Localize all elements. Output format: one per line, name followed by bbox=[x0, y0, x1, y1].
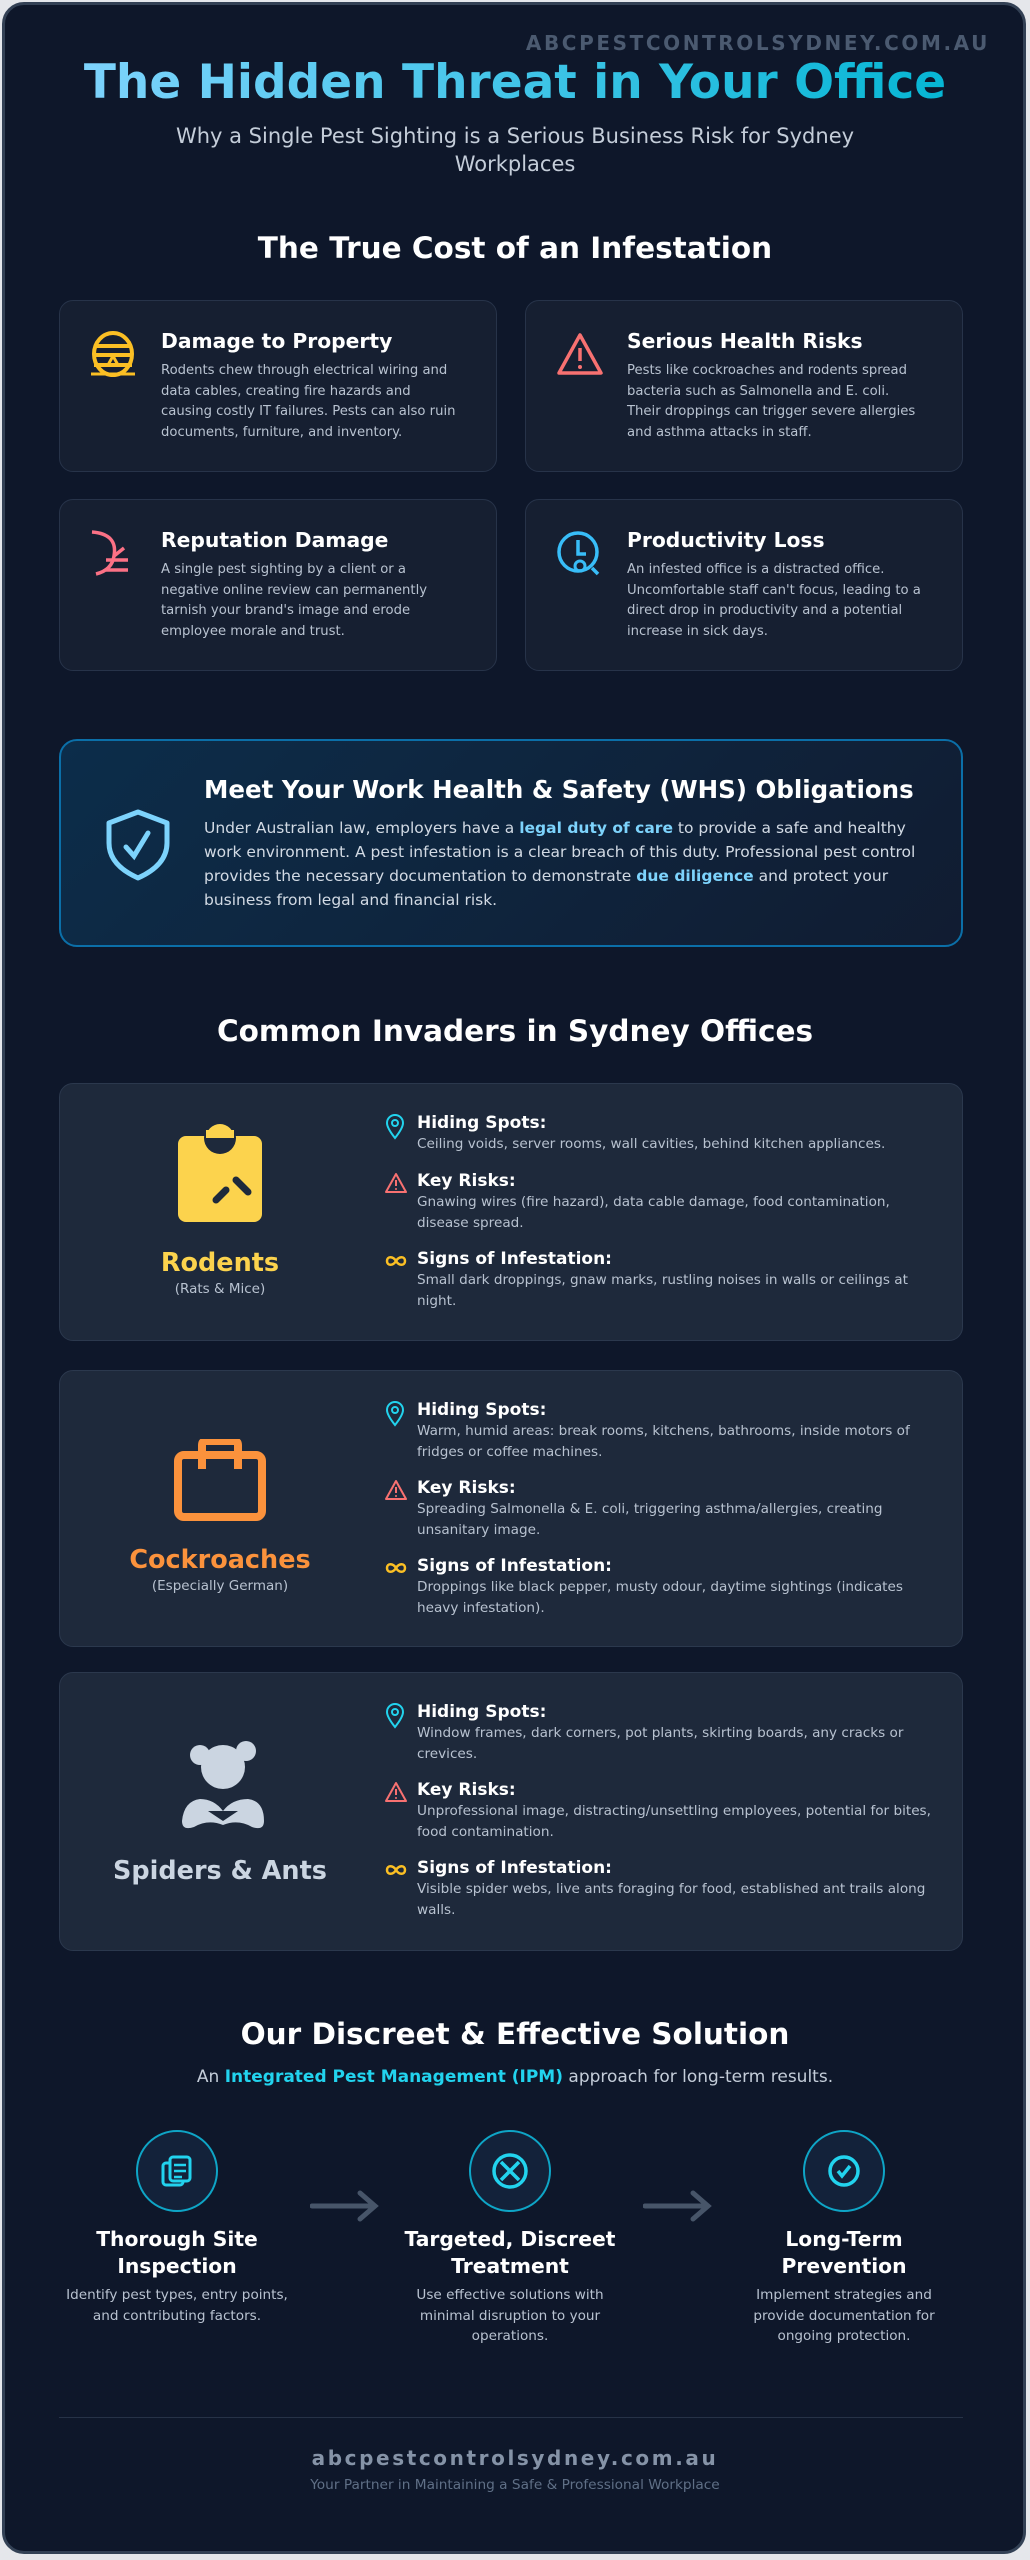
panel: damage to property bbox=[59, 300, 497, 472]
item: signs: Signs of Infestation: bbox=[417, 1249, 612, 1269]
panel: WHS obligations bbox=[59, 739, 963, 947]
item: signs bbox=[386, 1858, 925, 1918]
title: The Hidden Threat in Your Office bbox=[84, 55, 946, 110]
WHS body: Under Australian law, employers have a legal duty of care to provide a safe and healthy bbox=[204, 819, 906, 837]
step 2 text bbox=[404, 2227, 616, 2344]
item: key risks: disease spread. bbox=[417, 1214, 524, 1230]
WHS body bbox=[204, 819, 915, 909]
WHS title: Meet Your Work Health & Safety (WHS) Obligations bbox=[204, 775, 914, 804]
item: key risks: unsanitary image. bbox=[417, 1522, 540, 1538]
icon: warning bbox=[557, 333, 603, 375]
panel: health risks: Serious Health Risks bbox=[627, 329, 863, 353]
item: signs: walls. bbox=[417, 1902, 455, 1918]
step 2 text: minimal disruption to your bbox=[420, 2308, 600, 2324]
panel: reputation: Reputation Damage bbox=[161, 528, 388, 552]
panel: health risks bbox=[525, 300, 963, 472]
panel: damage to property: Rodents chew through electrical wiring and bbox=[161, 363, 447, 378]
step 1 text: Identify pest types, entry points, bbox=[66, 2287, 288, 2303]
item: hiding spots: Window frames, dark corners, pot plants, skirting boards, any cracks or bbox=[417, 1725, 903, 1741]
item: hiding spots: Ceiling voids, server rooms, wall cavities, behind kitchen appliances. bbox=[417, 1136, 885, 1152]
item: hiding spots: Hiding Spots: bbox=[417, 1702, 546, 1722]
subtitle bbox=[176, 124, 854, 176]
item: key risks: Key Risks: bbox=[417, 1478, 516, 1498]
solution subtitle: An Integrated Pest Management (IPM) approach for long-term results. bbox=[197, 2067, 833, 2087]
item: hiding spots: Hiding Spots: bbox=[417, 1113, 546, 1133]
item: signs: night. bbox=[417, 1292, 456, 1308]
panel: productivity: Uncomfortable staff can't focus, leading to a bbox=[627, 582, 921, 598]
item: signs: Small dark droppings, gnaw marks, rustling noises in walls or ceilings at bbox=[417, 1272, 908, 1288]
item: signs bbox=[386, 1556, 903, 1616]
subtitle: Why a Single Pest Sighting is a Serious Business Risk for Sydney bbox=[176, 124, 854, 148]
item: key risks: food contamination. bbox=[417, 1824, 554, 1840]
step 2 text: Targeted, Discreet bbox=[404, 2227, 616, 2251]
panel: reputation: employee morale and trust. bbox=[161, 624, 345, 638]
icon: damaged bbox=[91, 331, 135, 377]
item: signs: heavy infestation). bbox=[417, 1600, 545, 1616]
panel: rodents bbox=[59, 1083, 963, 1341]
item: key risks: Unprofessional image, distracting/unsettling employees, potential for bites, bbox=[417, 1803, 931, 1819]
panel: reputation: A single pest sighting by a client or a bbox=[161, 562, 406, 577]
panel: spiders & ants bbox=[59, 1672, 963, 1951]
step 3 text: Long-Term bbox=[785, 2227, 903, 2251]
item: key risks: Key Risks: bbox=[417, 1171, 516, 1191]
panel: health risks: Their droppings can trigger severe allergies bbox=[627, 404, 915, 419]
heading: solution: Our Discreet & Effective Solution bbox=[241, 2017, 789, 2051]
step 1 text: and contributing factors. bbox=[93, 2308, 261, 2324]
arrow 1 bbox=[310, 2190, 379, 2222]
panel: productivity: increase in sick days. bbox=[627, 624, 768, 638]
item: hiding spots: fridges or coffee machines. bbox=[417, 1444, 602, 1460]
panel: productivity: direct drop in productivity and a potential bbox=[627, 603, 902, 618]
panel: damage to property: Damage to Property bbox=[161, 329, 392, 353]
item: signs: Visible spider webs, live ants foraging for food, established ant trails along bbox=[417, 1881, 925, 1897]
panel: damage to property: data cables, creating fire hazards and bbox=[161, 384, 411, 398]
item: signs: Signs of Infestation: bbox=[417, 1556, 612, 1576]
step 2 icon bbox=[469, 2130, 551, 2212]
step 3 text bbox=[753, 2227, 935, 2344]
item: key risks bbox=[385, 1478, 882, 1538]
icon: cockroach bag bbox=[174, 1439, 266, 1521]
item: key risks: Key Risks: bbox=[417, 1780, 516, 1800]
step 1 text: Thorough Site bbox=[96, 2227, 258, 2251]
footer tagline: Your Partner in Maintaining a Safe & Professional Workplace bbox=[310, 2477, 720, 2493]
step 2 text: operations. bbox=[472, 2328, 548, 2344]
icon: rodent bbox=[178, 1124, 262, 1222]
step 3 icon bbox=[803, 2130, 885, 2212]
step 3 text: provide documentation for bbox=[753, 2308, 935, 2324]
icon: reputation bbox=[92, 530, 128, 576]
panel: productivity: Productivity Loss bbox=[627, 528, 825, 552]
panel: reputation: negative online review can permanently bbox=[161, 582, 427, 598]
item: signs: Signs of Infestation: bbox=[417, 1858, 612, 1878]
item: key risks bbox=[385, 1171, 890, 1230]
step 1 text: Inspection bbox=[117, 2254, 237, 2278]
icon: clock bbox=[557, 531, 600, 576]
panel: cockroaches: (Especially German) bbox=[152, 1578, 288, 1594]
step 1 text bbox=[66, 2227, 288, 2324]
icon: shield bbox=[106, 810, 170, 880]
panel: productivity: An infested office is a distracted office. bbox=[627, 562, 884, 577]
arrow 2 bbox=[643, 2190, 712, 2222]
panel: health risks: bacteria such as Salmonella and E. coli. bbox=[627, 384, 889, 398]
WHS body: provides the necessary documentation to demonstrate due diligence and protect your bbox=[204, 867, 888, 885]
step 2 text: Treatment bbox=[451, 2254, 569, 2278]
footer domain: abcpestcontrolsydney.com.au bbox=[312, 2446, 718, 2470]
item: hiding spots: Hiding Spots: bbox=[417, 1400, 546, 1420]
heading: common invaders: Common Invaders in Sydney Offices bbox=[217, 1014, 813, 1048]
item: hiding spots: crevices. bbox=[417, 1746, 477, 1762]
panel: reputation: tarnish your brand's image and erode bbox=[161, 603, 410, 618]
WHS body: work environment. A pest infestation is a clear breach of this duty. Professional pest control bbox=[204, 843, 915, 861]
panel: health risks: and asthma attacks in staff. bbox=[627, 424, 812, 440]
panel: damage to property: causing costly IT failures. Pests can also ruin bbox=[161, 404, 455, 419]
item: key risks: Spreading Salmonella & E. coli, triggering asthma/allergies, creating bbox=[417, 1501, 882, 1517]
item: signs: Droppings like black pepper, musty odour, daytime sightings (indicates bbox=[417, 1579, 903, 1595]
WHS body: business from legal and financial risk. bbox=[204, 891, 497, 909]
panel: productivity bbox=[525, 499, 963, 671]
icon: spider/ant bbox=[182, 1741, 264, 1828]
item: hiding spots bbox=[386, 1400, 910, 1460]
watermark: ABCPESTCONTROLSYDNEY.COM.AU bbox=[526, 31, 990, 55]
step 3 text: ongoing protection. bbox=[778, 2328, 910, 2344]
item: key risks: Gnawing wires (fire hazard), data cable damage, food contamination, bbox=[417, 1194, 890, 1210]
panel: cockroaches bbox=[59, 1370, 963, 1647]
step 1 icon bbox=[136, 2130, 218, 2212]
panel: rodents: (Rats & Mice) bbox=[175, 1281, 265, 1297]
label: cockroaches: Cockroaches bbox=[129, 1545, 311, 1575]
step 3 text: Implement strategies and bbox=[756, 2287, 932, 2303]
item: hiding spots: Warm, humid areas: break rooms, kitchens, bathrooms, inside motors of bbox=[417, 1423, 910, 1439]
item: key risks bbox=[385, 1780, 931, 1840]
panel: damage to property: documents, furniture, and inventory. bbox=[161, 424, 402, 440]
label: spiders & ants: Spiders & Ants bbox=[113, 1856, 327, 1886]
item: hiding spots bbox=[386, 1702, 904, 1762]
subtitle: Workplaces bbox=[455, 152, 575, 176]
panel: reputation bbox=[59, 499, 497, 671]
label: rodents: Rodents bbox=[161, 1248, 279, 1278]
panel: health risks: Pests like cockroaches and rodents spread bbox=[627, 363, 907, 378]
item: signs bbox=[386, 1249, 908, 1308]
step 2 text: Use effective solutions with bbox=[416, 2287, 604, 2303]
item: hiding spots bbox=[386, 1113, 885, 1152]
heading: true cost: The True Cost of an Infestation bbox=[258, 231, 772, 265]
step 3 text: Prevention bbox=[781, 2254, 907, 2278]
